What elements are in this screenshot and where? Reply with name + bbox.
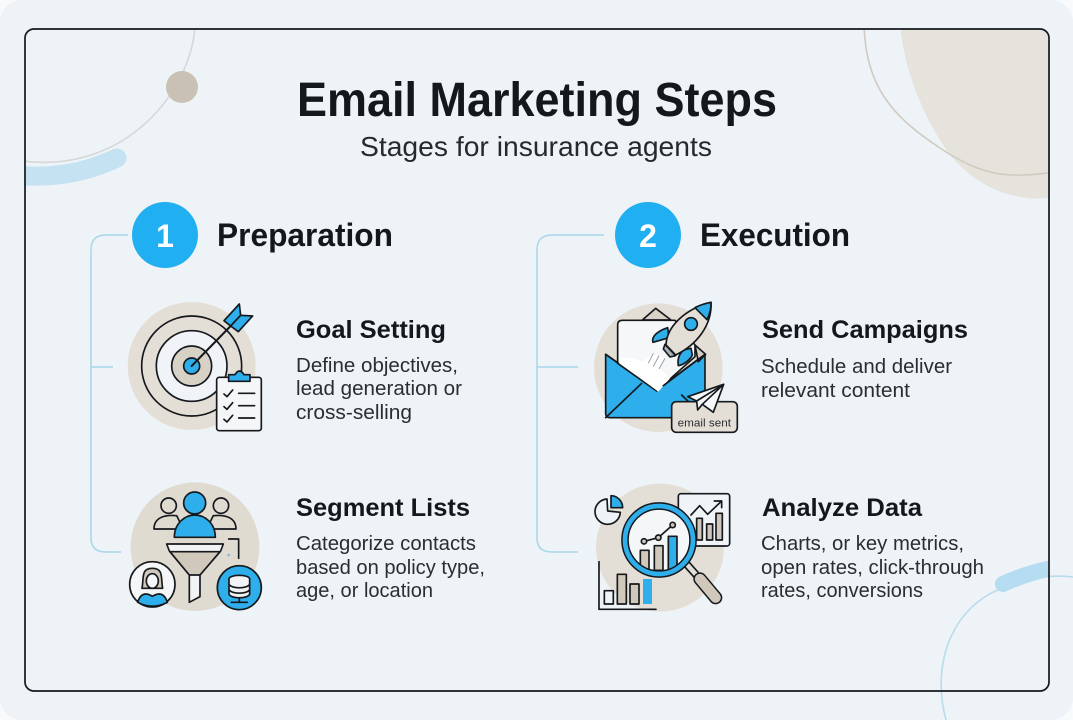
text: segment lists	[296, 494, 485, 602]
text: send campaigns	[761, 316, 968, 402]
text: analyze data: open rates, click-through	[761, 557, 984, 579]
text: analyze data: Charts, or key metrics,	[761, 533, 964, 555]
text: goal setting: cross-selling	[296, 402, 412, 424]
connector: execution	[537, 235, 604, 552]
badge: step 2	[615, 202, 681, 268]
text: send campaigns: Schedule and deliver	[761, 356, 952, 378]
decoration: bottom-right arc	[941, 565, 1073, 720]
icon: target with clipboard	[128, 302, 261, 431]
text: analyze data	[761, 494, 984, 602]
badge: step 1: 1	[156, 218, 174, 254]
connector: preparation	[91, 235, 128, 552]
badge: step 2: 2	[639, 218, 657, 254]
icon: magnifier with charts	[595, 484, 730, 612]
text: analyze data: rates, conversions	[761, 580, 923, 602]
decoration: top-right blob and curve	[864, 25, 1060, 199]
text: segment lists: age, or location	[296, 580, 433, 602]
heading: preparation: Preparation	[217, 217, 393, 253]
icon: envelope with rocket	[594, 302, 737, 432]
subtitle: Stages for insurance agents	[360, 131, 712, 162]
icon: audience funnel with profile and database	[130, 482, 261, 611]
heading: execution: Execution	[700, 217, 850, 253]
text: goal setting: Define objectives,	[296, 355, 458, 377]
icon: envelope with rocket: email sent	[678, 417, 732, 429]
badge: step 1	[132, 202, 198, 268]
decoration: top-left arc with dot	[5, 25, 198, 176]
text: send campaigns: Send Campaigns	[762, 316, 968, 344]
text: segment lists: Categorize contacts	[296, 533, 476, 555]
text: goal setting: lead generation or	[296, 378, 462, 400]
text: analyze data: Analyze Data	[762, 494, 923, 522]
text: send campaigns: relevant content	[761, 380, 910, 402]
text: segment lists: based on policy type,	[296, 557, 485, 579]
text: goal setting	[296, 316, 462, 424]
text: segment lists: Segment Lists	[296, 494, 470, 522]
title: Email Marketing Steps	[297, 74, 777, 127]
text: goal setting: Goal Setting	[296, 316, 446, 344]
